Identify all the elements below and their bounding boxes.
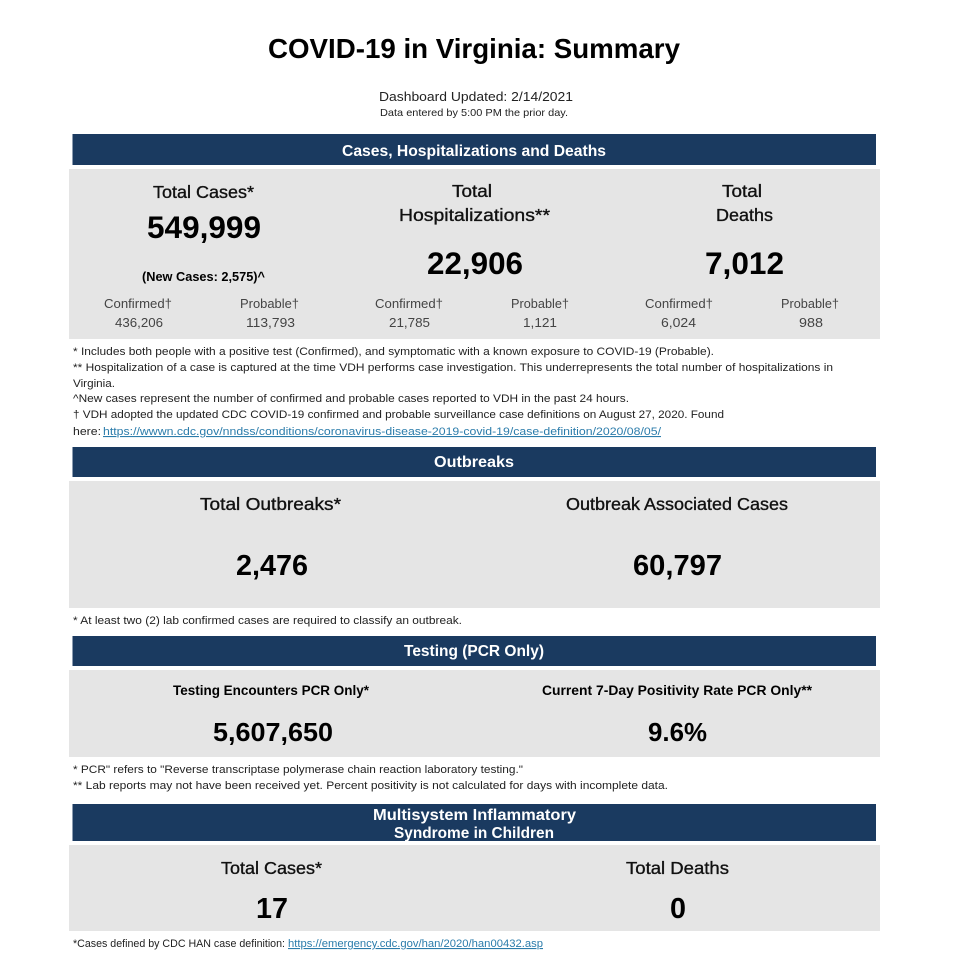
metric: positivity rate: Current 7-Day Positivity Rate PCR Only** bbox=[542, 683, 813, 698]
panel: multisystem inflammatory syndrome bbox=[69, 845, 880, 931]
metric: total deaths bbox=[645, 181, 839, 330]
footnotes: testing: * PCR" refers to "Reverse transcriptase polymerase chain reaction laboratory testing." bbox=[73, 764, 523, 776]
section: cases, hospitalizations and deaths bbox=[69, 134, 880, 438]
section: testing bbox=[69, 636, 880, 792]
footnotes: cases: https://wwwn.cdc.gov/nndss/conditions/coronavirus-disease-2019-covid-19/case-definition/2020/08/05/ bbox=[103, 426, 662, 438]
metric: total cases: 113,793 bbox=[246, 315, 295, 330]
footnotes: cases: * Includes both people with a positive test (Confirmed), and symptomatic with a known exposure to COVID-19 (Probable). bbox=[73, 346, 714, 358]
metric: total cases: 436,206 bbox=[115, 315, 163, 330]
metric: MIS-C total deaths: 0 bbox=[670, 893, 686, 925]
metric: outbreak associated cases bbox=[566, 494, 788, 582]
metric: total hospitalizations bbox=[375, 181, 569, 330]
header bar: multisystem inflammatory syndrome bbox=[72, 804, 876, 842]
metric: total hospitalizations: 1,121 bbox=[523, 315, 557, 330]
footnotes: cases: Virginia. bbox=[73, 378, 115, 390]
section: multisystem inflammatory syndrome bbox=[69, 804, 880, 950]
header bar: testing bbox=[72, 636, 876, 666]
metric: total cases: Probable† bbox=[240, 296, 299, 311]
metric: total hospitalizations: Hospitalizations** bbox=[399, 205, 550, 225]
metric: MIS-C total deaths bbox=[626, 858, 729, 925]
panel: testing bbox=[69, 670, 880, 757]
metric: outbreak associated cases: Outbreak Associated Cases bbox=[566, 494, 788, 514]
section: outbreaks bbox=[69, 447, 880, 627]
metric: total hospitalizations: 21,785 bbox=[389, 315, 430, 330]
metric: total outbreaks: Total Outbreaks* bbox=[200, 494, 341, 514]
dashboard updated date: Dashboard Updated: 2/14/2021 bbox=[379, 89, 573, 104]
data entry note: Data entered by 5:00 PM the prior day. bbox=[380, 107, 568, 119]
footnotes: cases bbox=[73, 346, 833, 438]
header bar: testing: Testing (PCR Only) bbox=[404, 643, 544, 660]
footnotes: testing bbox=[73, 764, 668, 792]
metric: total deaths: 7,012 bbox=[705, 245, 784, 281]
header bar: multisystem inflammatory syndrome: Syndrome in Children bbox=[394, 825, 554, 842]
metric: total hospitalizations: Total bbox=[452, 181, 492, 201]
metric: total outbreaks bbox=[200, 494, 341, 582]
header bar: outbreaks: Outbreaks bbox=[434, 454, 514, 471]
metric: total cases: Confirmed† bbox=[104, 296, 172, 311]
metric: MIS-C total cases bbox=[221, 858, 322, 925]
metric: positivity rate: 9.6% bbox=[648, 717, 707, 747]
panel: outbreaks bbox=[69, 481, 880, 608]
metric: MIS-C total deaths: Total Deaths bbox=[626, 858, 729, 878]
footnotes: cases: ** Hospitalization of a case is captured at the time VDH performs case investigation. This underrepresents the total number of hospitalizations in bbox=[73, 362, 833, 374]
header bar: cases: Cases, Hospitalizations and Deaths bbox=[342, 143, 606, 160]
header bar: cases bbox=[72, 134, 876, 165]
header bar: multisystem inflammatory syndrome: Multisystem Inflammatory bbox=[373, 807, 576, 824]
metric: total cases: Total Cases* bbox=[153, 182, 254, 202]
footnote: case definition: https://emergency.cdc.gov/han/2020/han00432.asp bbox=[288, 938, 543, 950]
metric: total deaths: 6,024 bbox=[661, 315, 696, 330]
footnote: case definition: *Cases defined by CDC HAN case definition: bbox=[73, 938, 285, 950]
metric: total cases: (New Cases: 2,575)^ bbox=[142, 270, 266, 284]
panel: cases bbox=[69, 169, 880, 339]
metric: MIS-C total cases: 17 bbox=[256, 893, 288, 925]
metric: MIS-C total cases: Total Cases* bbox=[221, 858, 322, 878]
metric: total cases bbox=[104, 182, 299, 330]
metric: total outbreaks: 2,476 bbox=[236, 550, 308, 582]
metric: testing encounters bbox=[173, 683, 370, 747]
metric: total deaths: 988 bbox=[799, 315, 823, 330]
metric: total cases: 549,999 bbox=[147, 209, 261, 245]
footnotes: cases: here: bbox=[73, 426, 101, 438]
metric: total deaths: Total bbox=[722, 181, 762, 201]
metric: total hospitalizations: Probable† bbox=[511, 296, 569, 311]
header bar: outbreaks bbox=[72, 447, 876, 477]
metric: total deaths: Probable† bbox=[781, 296, 839, 311]
title: COVID-19 in Virginia: Summary bbox=[268, 33, 680, 64]
metric: outbreak associated cases: 60,797 bbox=[633, 550, 722, 582]
footnotes: cases: † VDH adopted the updated CDC COVID-19 confirmed and probable surveillance case definitions on August 27, 2020. Found bbox=[73, 409, 724, 421]
footnote: outbreaks: * At least two (2) lab confirmed cases are required to classify an outbreak. bbox=[73, 615, 462, 627]
metric: total hospitalizations: 22,906 bbox=[427, 245, 523, 281]
footnotes: cases: ^New cases represent the number of confirmed and probable cases reported to VDH in the past 24 hours. bbox=[73, 393, 629, 405]
metric: testing encounters: 5,607,650 bbox=[213, 717, 333, 747]
metric: total deaths: Deaths bbox=[716, 205, 773, 225]
metric: positivity rate bbox=[542, 683, 813, 747]
metric: total deaths: Confirmed† bbox=[645, 296, 713, 311]
footnotes: testing: ** Lab reports may not have been received yet. Percent positivity is not calculated for days with incomplete data. bbox=[73, 780, 668, 792]
metric: total hospitalizations: Confirmed† bbox=[375, 296, 443, 311]
footnote: case definition bbox=[73, 938, 543, 950]
metric: testing encounters: Testing Encounters PCR Only* bbox=[173, 683, 370, 698]
